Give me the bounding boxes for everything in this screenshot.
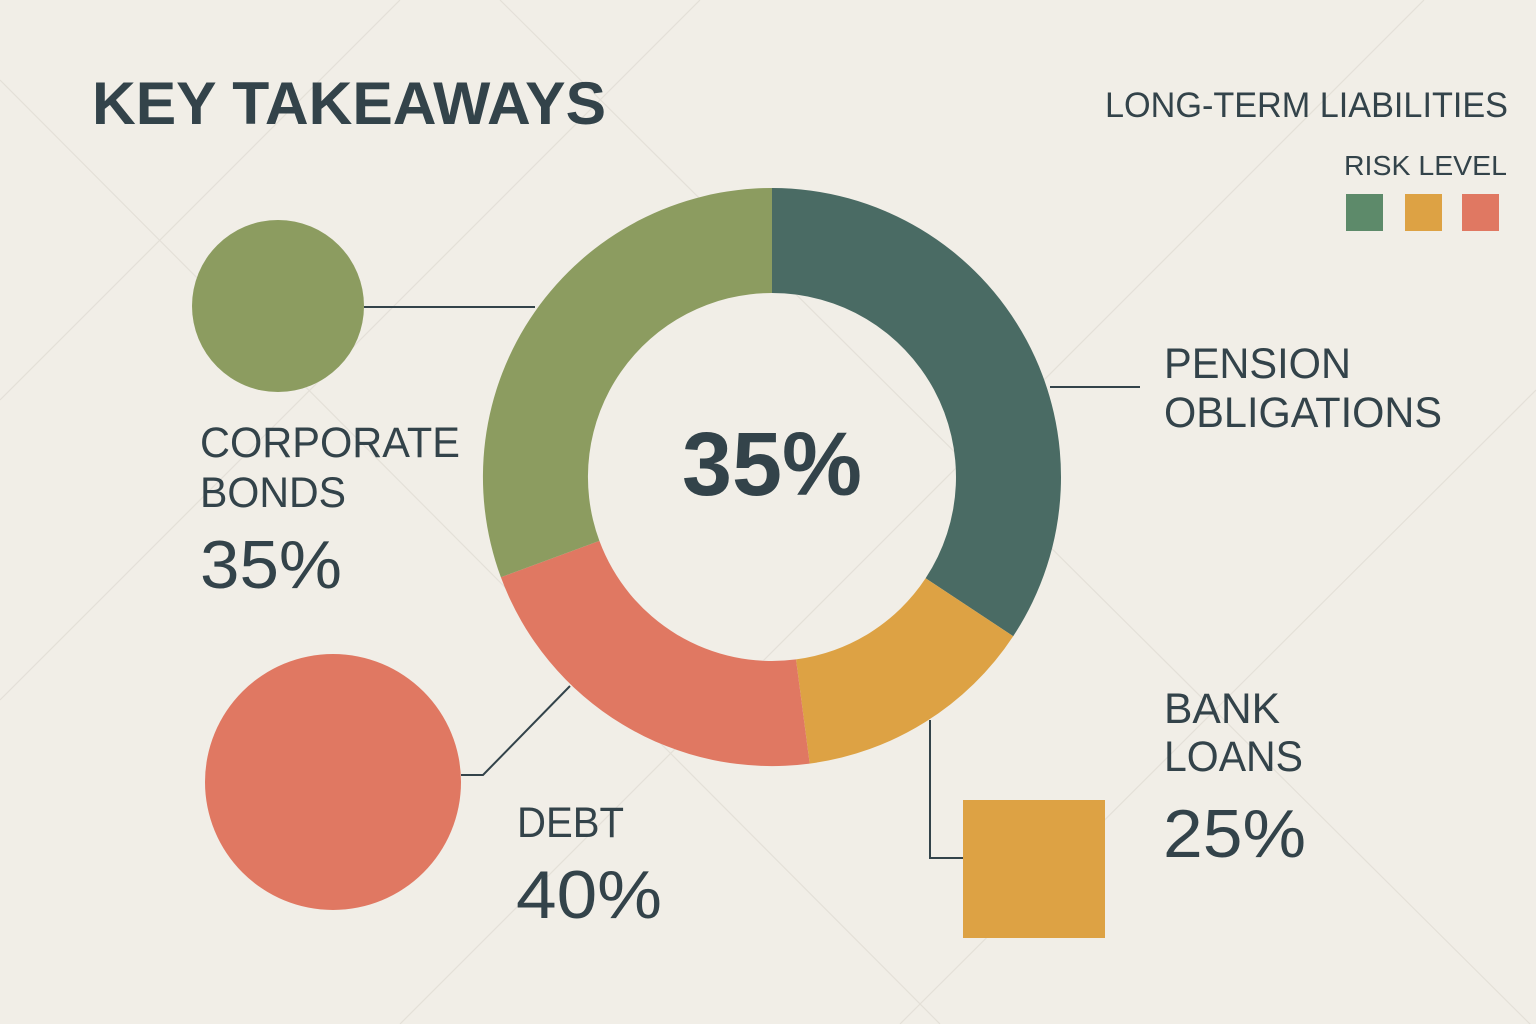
segment: debt (red) 172.5-249.7 — [501, 541, 810, 766]
label: debt — [516, 799, 662, 933]
label: corporate bonds: 35% — [200, 527, 342, 603]
label: bank loans: BANK — [1164, 685, 1280, 733]
icon: olive circle — [192, 220, 364, 392]
connector lines — [364, 307, 1140, 858]
segment: corporate bonds (olive) 249.7-360 — [483, 188, 772, 577]
label: corporate bonds: BONDS — [200, 469, 346, 517]
icon: orange square — [963, 800, 1105, 938]
label: bank loans: LOANS — [1164, 733, 1303, 781]
subtitle: long-term liabilities: LONG-TERM LIABILITIES — [1105, 86, 1508, 125]
icon: red circle — [205, 654, 461, 910]
center value: 35% — [682, 415, 862, 515]
label: corporate bonds: CORPORATE — [200, 419, 460, 467]
label: debt: 40% — [516, 857, 662, 933]
segment: bank loans (orange) 123.4-172.5 — [796, 578, 1013, 764]
label: pension obligations: PENSION — [1164, 340, 1351, 388]
label: bank loans — [1163, 685, 1306, 872]
segment: pension (dark green) 0-123.4 — [772, 188, 1061, 636]
label: bank loans: 25% — [1163, 796, 1306, 872]
label: pension obligations: OBLIGATIONS — [1164, 389, 1442, 437]
label: corporate bonds — [200, 419, 460, 603]
title: KEY TAKEAWAYS — [92, 70, 606, 137]
label: debt: DEBT — [517, 799, 624, 847]
legend: risk level: RISK LEVEL — [1344, 150, 1507, 181]
legend: risk level — [1344, 150, 1507, 231]
donut chart — [483, 188, 1061, 766]
label: pension obligations — [1164, 340, 1442, 437]
